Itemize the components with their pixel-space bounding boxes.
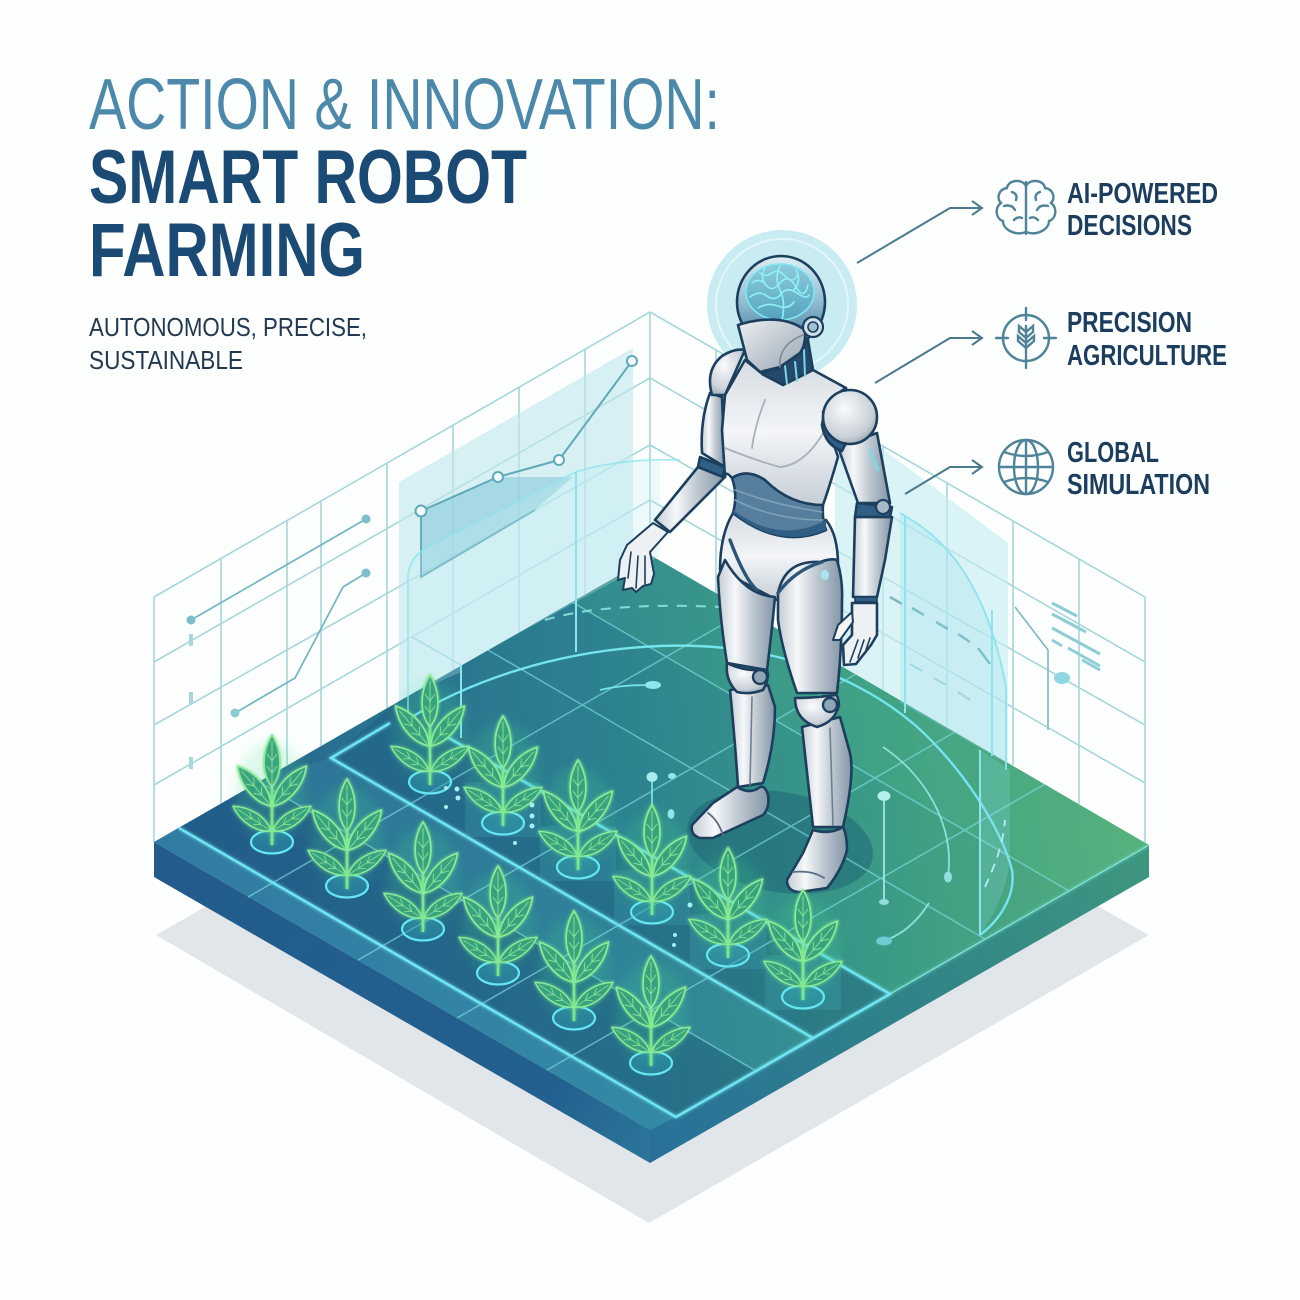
right wall data and text lines — [890, 597, 1100, 730]
plant: front row 4 — [455, 866, 541, 984]
robot right arm — [833, 433, 892, 665]
plant: back row 5 — [685, 848, 771, 966]
icon: globe — [999, 440, 1053, 494]
robot ear — [803, 317, 823, 337]
arrow — [857, 201, 982, 263]
robot pelvis — [720, 513, 838, 600]
trend line — [421, 361, 632, 511]
robot abdomen band — [733, 510, 826, 537]
plant: back row 3 — [535, 760, 621, 878]
robot right leg — [778, 559, 851, 827]
holographic wall grid: left — [154, 312, 650, 842]
platform: top surface — [154, 556, 1149, 1130]
robot — [618, 230, 892, 892]
arrow — [875, 331, 982, 383]
arrow — [905, 460, 982, 494]
plant: back row 6 — [760, 890, 846, 1008]
tinted panel on right wall — [835, 425, 1008, 763]
label: AI-POWERED — [1067, 178, 1218, 210]
platform: right side face — [650, 845, 1149, 1163]
left wall data lines with nodes — [186, 514, 370, 769]
callout: AI-powered decisions: DECISIONS — [1067, 210, 1192, 242]
plant light columns — [465, 782, 841, 1010]
icon: crosshair with wheat — [996, 308, 1056, 368]
robot chest — [722, 360, 846, 505]
robot left shoulder cap — [710, 350, 745, 395]
robot toe seams — [708, 813, 824, 878]
robot left foot — [692, 787, 768, 838]
label: GLOBAL — [1067, 437, 1159, 469]
platform ground shadow — [156, 795, 1149, 1223]
floor grid lines — [248, 602, 1069, 1071]
title line: action and innovation: ACTION & INNOVATION: — [89, 65, 720, 145]
robot neck — [762, 340, 813, 385]
plant: front row 3 — [380, 822, 466, 940]
robot abdomen stripes — [735, 490, 823, 520]
icon: brain — [997, 181, 1055, 234]
chart area — [421, 477, 573, 577]
plant: front row 1 — [229, 735, 315, 854]
robot face — [738, 320, 805, 372]
callout: precision agriculture: AGRICULTURE — [1067, 340, 1227, 372]
plant: back row 2 — [460, 716, 546, 834]
glowing field boundaries — [179, 723, 1149, 1117]
callout: AI-powered decisions — [857, 178, 1218, 263]
robot right foot — [787, 827, 847, 892]
plant: front row 2 — [304, 779, 390, 898]
planting plots shading — [154, 556, 1149, 1130]
callout: global simulation: SIMULATION — [1067, 469, 1210, 501]
callout: precision agriculture — [875, 307, 1227, 383]
plant: front row 5 — [531, 911, 617, 1030]
platform: left side face — [154, 842, 650, 1163]
title line: smart robot: SMART ROBOT — [89, 135, 527, 220]
label: PRECISION — [1067, 307, 1192, 339]
plant: front row 6 — [608, 956, 694, 1074]
subtitle — [89, 312, 367, 375]
robot abdomen — [732, 473, 826, 537]
subtitle: AUTONOMOUS, PRECISE, — [89, 312, 367, 342]
title line: farming: FARMING — [89, 208, 365, 293]
plant: back row 1 — [387, 675, 473, 794]
holographic panel: left cuboid — [408, 460, 680, 738]
robot dome — [737, 256, 825, 348]
robot head — [737, 256, 825, 372]
robot halo — [707, 230, 857, 380]
robot pelvis seams — [730, 540, 822, 593]
title — [89, 65, 720, 293]
plant: back row 4 — [609, 805, 695, 924]
floor arc and nodes — [407, 606, 1013, 946]
callout: global simulation — [905, 437, 1210, 501]
robot brain — [746, 264, 814, 320]
holographic wall grid: right — [650, 312, 1145, 842]
subtitle: SUSTAINABLE — [89, 345, 243, 375]
robot left arm — [618, 393, 725, 592]
translucent chart panel on left wall — [399, 348, 637, 702]
robot ground shadow — [679, 776, 881, 908]
robot right shoulder — [822, 388, 877, 451]
sensor particles — [444, 786, 692, 947]
holographic panel: right curved screen — [900, 513, 1010, 935]
robot left leg — [718, 560, 775, 787]
